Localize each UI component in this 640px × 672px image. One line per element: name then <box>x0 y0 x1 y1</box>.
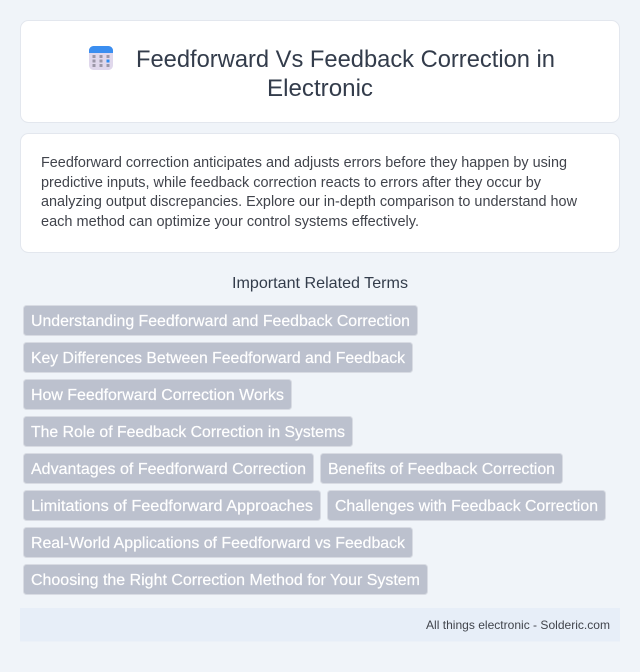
panel: title card <box>20 20 620 122</box>
footer <box>20 608 620 642</box>
title: Electronic <box>267 75 373 102</box>
title: Feedforward Vs Feedback Correction in <box>136 46 555 73</box>
tag list <box>24 306 606 594</box>
tag: Advantages of Feedforward Correction <box>31 461 306 478</box>
tag <box>24 490 320 520</box>
tag <box>24 528 412 558</box>
icon: calendar <box>89 46 113 70</box>
tag <box>320 454 562 484</box>
tag <box>24 306 418 336</box>
text block: summary <box>41 155 578 230</box>
text block: summary: predictive inputs, while feedback correction reacts to errors after they occur by <box>41 175 542 191</box>
tag: Understanding Feedforward and Feedback Correction <box>31 313 410 330</box>
text block: summary: Feedforward correction anticipates and adjusts errors before they happen by using <box>41 155 567 171</box>
heading: important related terms: Important Related Terms <box>232 275 408 292</box>
tag: Real-World Applications of Feedforward vs Feedback <box>31 535 406 552</box>
footer text: All things electronic - Solderic.com <box>426 618 610 632</box>
tag <box>24 342 412 372</box>
text block: summary: each method can optimize your control systems effectively. <box>41 214 419 230</box>
tag: Challenges with Feedback Correction <box>335 498 598 515</box>
tag <box>24 380 292 410</box>
tag <box>24 416 352 446</box>
tag: Limitations of Feedforward Approaches <box>31 498 313 515</box>
tag <box>24 454 314 484</box>
panel: summary <box>20 134 620 252</box>
tag: How Feedforward Correction Works <box>31 387 284 404</box>
tag: Choosing the Right Correction Method for Your System <box>31 572 420 589</box>
tag: The Role of Feedback Correction in Systems <box>31 424 345 441</box>
tag: Benefits of Feedback Correction <box>328 461 555 478</box>
text block: summary: analyzing output discrepancies. Explore our in-depth comparison to understand how <box>41 194 578 210</box>
tag <box>24 564 428 594</box>
tag: Key Differences Between Feedforward and Feedback <box>31 350 406 367</box>
tag <box>328 490 606 520</box>
